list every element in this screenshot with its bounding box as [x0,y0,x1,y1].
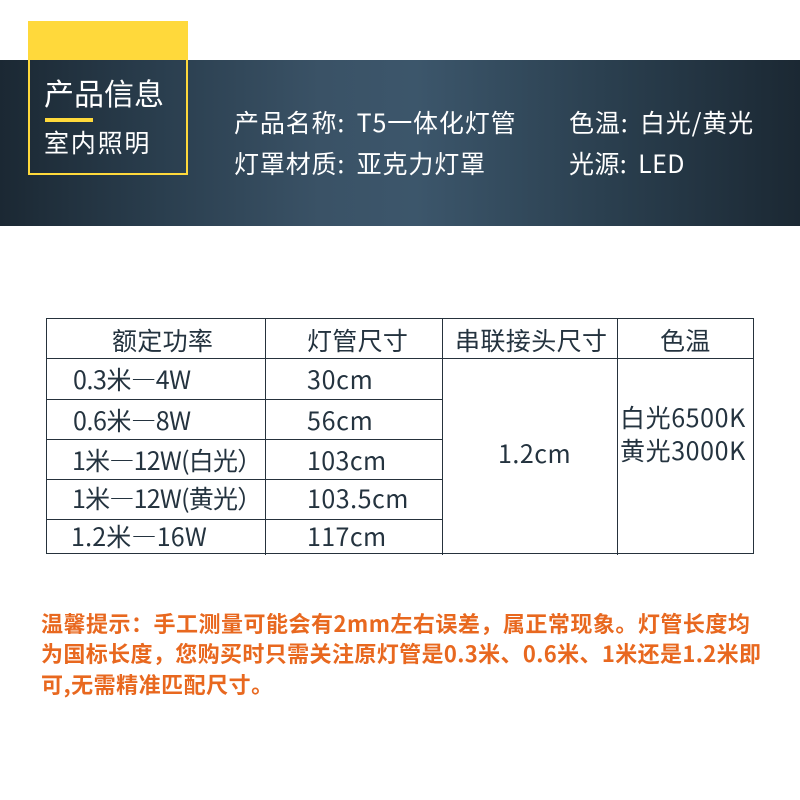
table header: connector size: 串联接头尺寸 [455,322,607,358]
note line 2: 为国标长度，您购买时只需关注原灯管是0.3米、0.6米、1米还是1.2米即 [41,637,761,669]
spec: color: 色温: 白光/黄光 [569,104,754,140]
table [46,318,754,555]
note line 3: 可,无需精准匹配尺寸。 [41,668,274,700]
spec: product name: 产品名称: T5一体化灯管 [234,104,516,140]
row 4 size: 103.5cm [307,480,409,516]
spec: shade material: 灯罩材质: 亚克力灯罩 [234,145,486,181]
connector size value: 1.2cm [498,435,571,471]
table header: tube size: 灯管尺寸 [307,322,408,358]
row 1 size: 30cm [307,361,373,397]
title: 产品信息 [44,70,164,114]
yellow light temperature: 黄光3000K [620,432,746,468]
row 5 size: 117cm [307,518,387,554]
subtitle: 室内照明 [44,124,151,160]
row 2 size: 56cm [307,402,373,438]
white light temperature: 白光6500K [620,399,746,435]
row 4 power: 1米—12W(黄光） [72,480,262,516]
yellow tab [28,21,188,60]
title box [28,60,188,175]
title accent bar [45,118,93,122]
note line 1: 温馨提示：手工测量可能会有2mm左右误差，属正常现象。灯管长度均 [41,607,750,639]
row 3 power: 1米—12W(白光） [72,442,262,478]
spec: light source: 光源: LED [569,145,685,181]
row 5 power: 1.2米—16W [71,518,207,554]
table header: color temperature: 色温 [660,322,711,358]
header band [0,60,800,226]
row 3 size: 103cm [307,442,387,478]
row 2 power: 0.6米—8W [73,402,191,438]
table header: rated power: 额定功率 [112,322,213,358]
row 1 power: 0.3米—4W [73,361,191,397]
